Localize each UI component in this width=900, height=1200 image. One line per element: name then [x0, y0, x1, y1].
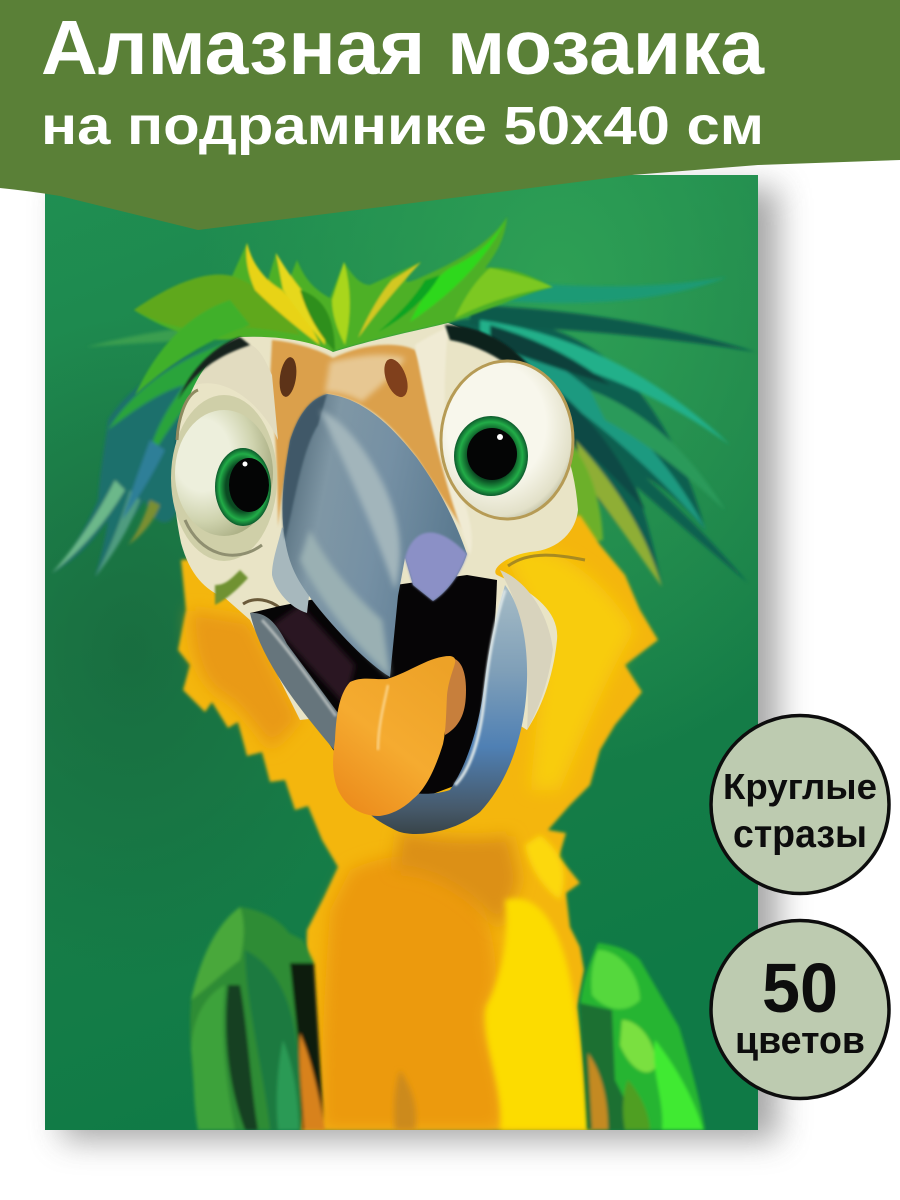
parrot tongue	[333, 656, 466, 816]
painting: parrot on green canvas	[45, 175, 758, 1130]
mouth corner folds	[500, 570, 553, 730]
bright yellow right cheek	[500, 544, 635, 790]
badge: 50 colours: цветов	[735, 1020, 865, 1062]
parrot head face	[174, 323, 585, 730]
badge: 50 colours: 50	[762, 949, 838, 1027]
parrot right eye	[441, 361, 573, 519]
subtitle: на подрамнике 50х40 см	[41, 96, 764, 156]
yellow chest	[485, 898, 591, 1130]
title: Алмазная мозаика	[41, 5, 765, 91]
badge: round rhinestones	[711, 716, 889, 894]
parrot open mouth	[250, 575, 497, 795]
parrot crest	[134, 217, 553, 395]
parrot right head feathers	[448, 277, 756, 587]
badge: 50 colours	[711, 920, 889, 1098]
badge: round rhinestones: Круглые	[723, 766, 877, 807]
parrot yellow neck and body	[178, 515, 658, 1130]
painting background	[45, 175, 758, 1130]
orange left cheek	[190, 610, 300, 750]
badge: round rhinestones: стразы	[733, 813, 867, 856]
parrot lower jaw	[250, 585, 527, 834]
parrot left eye	[171, 390, 277, 561]
parrot upper beak	[272, 394, 467, 677]
dark brow shadows	[178, 337, 250, 400]
canvas shadow	[62, 188, 778, 1140]
orange chest	[322, 856, 502, 1130]
top banner	[0, 0, 900, 230]
orange brow around nostrils	[270, 340, 470, 540]
white cheek scales	[415, 325, 472, 555]
parrot right wing	[580, 943, 705, 1130]
nostrils	[280, 357, 296, 397]
parrot left wing	[190, 907, 325, 1130]
parrot left head feathers	[53, 330, 224, 576]
